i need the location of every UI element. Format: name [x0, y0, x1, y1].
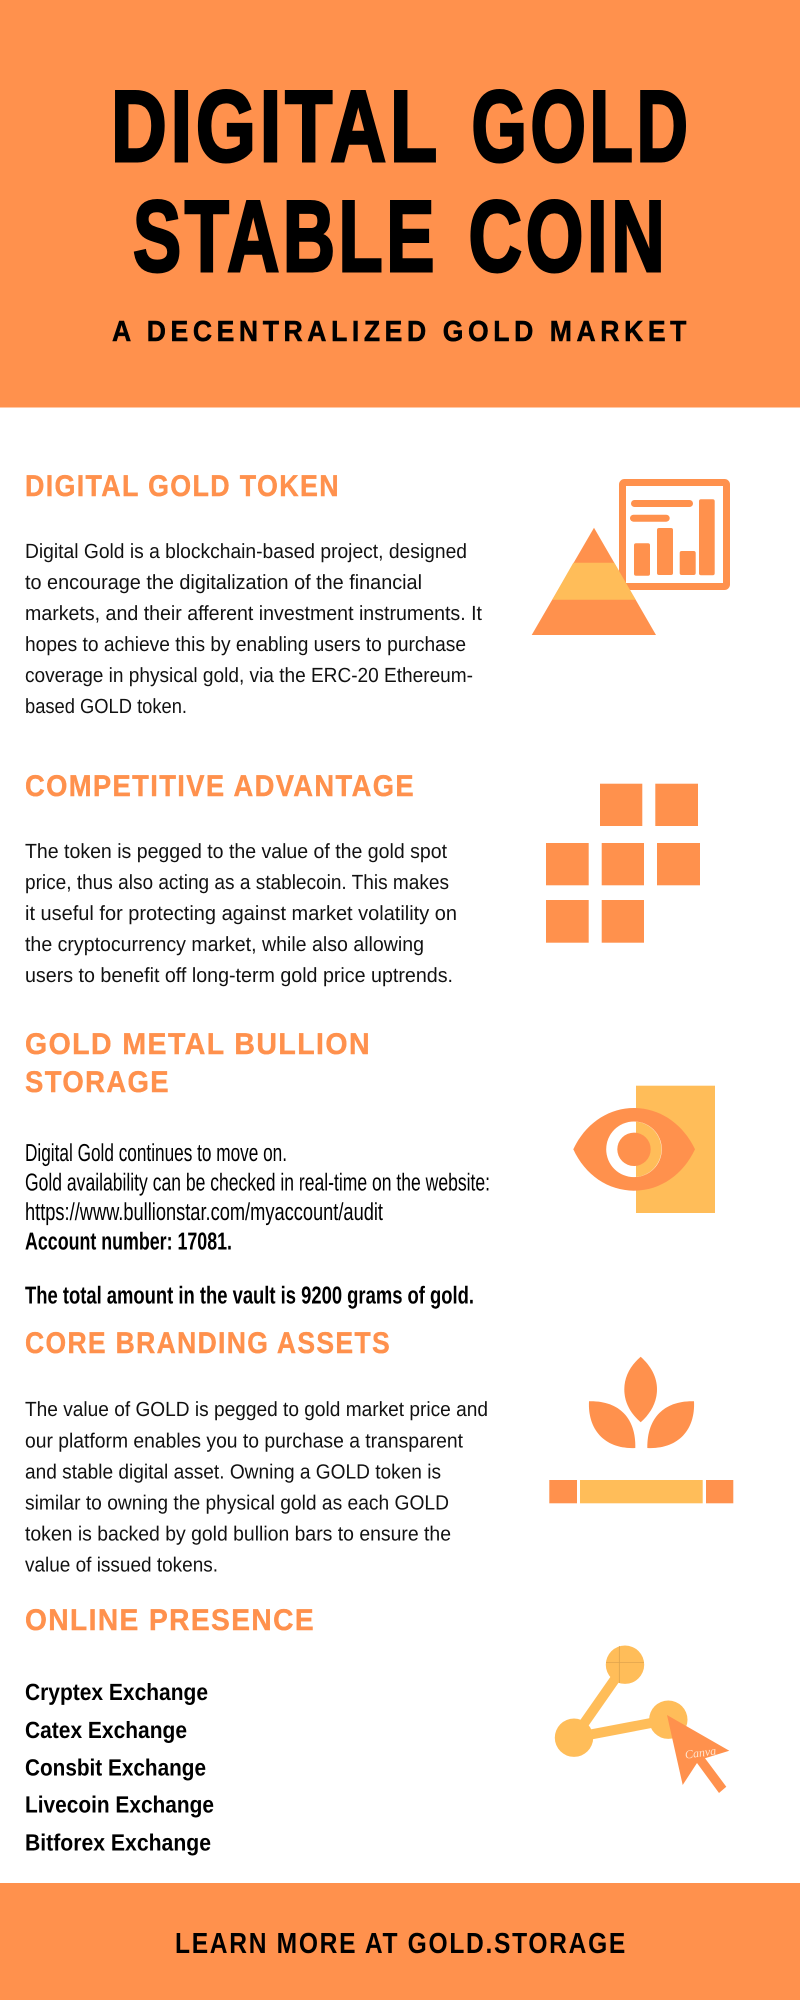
text block: core branding description: and stable digital asset. Owning a GOLD token is: [25, 1460, 441, 1483]
heading: competitive advantage: COMPETITIVE ADVANTAGE: [25, 770, 415, 803]
text block: digital gold description: markets, and their afferent investment instruments. It: [25, 602, 482, 625]
text block: storage description: The total amount in the vault is 9200 grams of gold.: [25, 1282, 474, 1309]
text block: competitive advantage description: [25, 840, 457, 987]
text block: digital gold description: Digital Gold is a blockchain-based project, designed: [25, 540, 467, 563]
text block: digital gold description: based GOLD token.: [25, 695, 187, 718]
text block: core branding description: our platform enables you to purchase a transparent: [25, 1429, 463, 1452]
panel: digital gold token: [25, 470, 726, 718]
icon: network nodes and cursor: Canva: [684, 1744, 717, 1762]
panel: header: [0, 0, 800, 408]
heading: gold metal bullion storage: STORAGE: [25, 1066, 170, 1099]
icon: plant leaves and bar: [549, 1357, 733, 1503]
heading: gold metal bullion storage: [25, 1028, 371, 1099]
text block: digital gold description: coverage in physical gold, via the ERC-20 Ethereum-: [25, 664, 473, 687]
subtitle: A DECENTRALIZED GOLD MARKET: [112, 316, 691, 348]
panel: competitive advantage: [25, 770, 700, 987]
text block: competitive advantage description: The token is pegged to the value of the gold spot: [25, 840, 447, 863]
text block: storage description: https://www.bullionstar.com/myaccount/audit: [25, 1199, 383, 1226]
list: exchanges: Bitforex Exchange: [25, 1830, 211, 1856]
title: GOLD: [472, 71, 692, 183]
text block: competitive advantage description: it useful for protecting against market volatility on: [25, 902, 457, 925]
text block: competitive advantage description: price, thus also acting as a stablecoin. This makes: [25, 871, 449, 894]
text block: core branding description: [25, 1398, 488, 1576]
text block: core branding description: The value of GOLD is pegged to gold market price and: [25, 1398, 488, 1421]
footer call to action: LEARN MORE AT GOLD.STORAGE: [175, 1928, 627, 1960]
heading: digital gold token: DIGITAL GOLD TOKEN: [25, 470, 340, 503]
text block: competitive advantage description: users to benefit off long-term gold price uptrends.: [25, 964, 453, 987]
title: DIGITAL: [111, 71, 441, 183]
text block: storage description: Account number: 17081.: [25, 1228, 232, 1255]
list: exchanges: Livecoin Exchange: [25, 1792, 214, 1818]
text block: digital gold description: hopes to achieve this by enabling users to purchase: [25, 633, 466, 656]
icon: squares grid: [546, 784, 700, 943]
heading: online presence: ONLINE PRESENCE: [25, 1604, 315, 1637]
icon: eye: [573, 1086, 715, 1213]
text block: core branding description: similar to owning the physical gold as each GOLD: [25, 1491, 449, 1514]
icon: chart and pyramid: [532, 482, 726, 635]
text block: storage description: Digital Gold continues to move on.: [25, 1140, 287, 1167]
panel: online presence: [25, 1604, 729, 1856]
heading: gold metal bullion storage: GOLD METAL BULLION: [25, 1028, 371, 1061]
list: exchanges: Cryptex Exchange: [25, 1679, 208, 1705]
text block: core branding description: token is backed by gold bullion bars to ensure the: [25, 1522, 451, 1545]
title: COIN: [468, 181, 668, 293]
title: [111, 71, 692, 293]
icon: network nodes and cursor: [555, 1646, 729, 1793]
text block: digital gold description: [25, 540, 482, 718]
text block: digital gold description: to encourage the digitalization of the financial: [25, 571, 422, 594]
title: STABLE: [133, 181, 438, 293]
panel: core branding assets: [25, 1327, 733, 1576]
panel: gold metal bullion storage: [25, 1028, 715, 1309]
text block: storage description: [25, 1140, 490, 1309]
panel: footer: [0, 1883, 800, 2000]
list: exchanges: [25, 1679, 214, 1856]
text block: storage description: Gold availability can be checked in real-time on the website:: [25, 1170, 490, 1197]
text block: competitive advantage description: the cryptocurrency market, while also allowing: [25, 933, 424, 956]
list: exchanges: Consbit Exchange: [25, 1755, 206, 1781]
heading: core branding assets: CORE BRANDING ASSETS: [25, 1327, 391, 1360]
text block: core branding description: value of issued tokens.: [25, 1553, 218, 1576]
list: exchanges: Catex Exchange: [25, 1717, 187, 1743]
